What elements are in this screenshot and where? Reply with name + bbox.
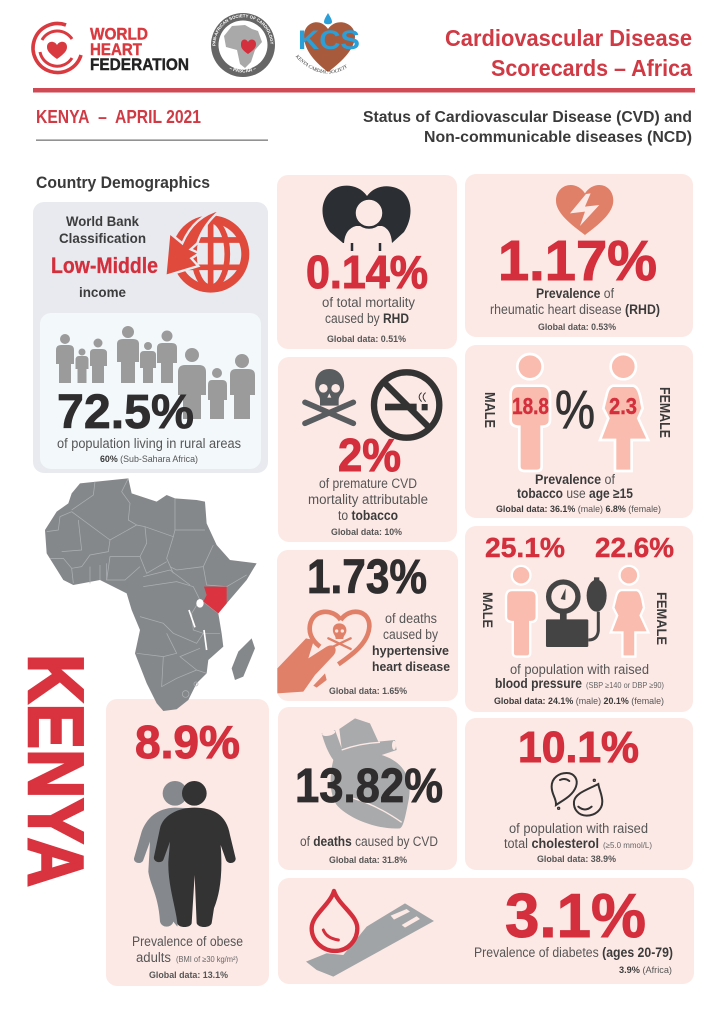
text: RHD mortality caption: of total mortality — [322, 295, 415, 310]
panel: diabetes — [278, 878, 694, 984]
text: RHD prevalence global data: Global data: 0.53% — [538, 322, 616, 333]
panel: RHD prevalence — [465, 174, 693, 337]
logo: World Heart Federation — [33, 23, 189, 74]
header rule — [33, 88, 695, 92]
map: Africa with Kenya highlighted — [45, 478, 257, 711]
text: CVD deaths caption: of deaths caused by CVD — [300, 834, 438, 849]
icon: cholesterol drops — [552, 773, 602, 816]
logo: World Heart Federation: WORLD — [90, 26, 148, 44]
inner panel: rural population — [40, 313, 261, 469]
text: RHD mortality caption: caused by RHD — [325, 311, 409, 326]
logo: Kenya Cardiac Society: KENYA CARDIAC SOCIETY — [296, 54, 347, 74]
text: diabetes comparison: 3.9% (Africa) — [619, 965, 672, 976]
text: hypertensive caption: caused by — [383, 627, 438, 642]
text: cholesterol caption: of population with raised — [509, 821, 648, 836]
stat: female tobacco: 2.3 — [609, 393, 637, 419]
icon: male figure — [506, 566, 537, 657]
text: tobacco mortality caption: of premature CVD — [319, 476, 417, 491]
text: tobacco mortality caption: to tobacco — [338, 508, 398, 523]
text: blood pressure global data: Global data: 24.1% (male) 20.1% (female) — [494, 696, 664, 707]
panel: blood pressure — [465, 526, 693, 712]
header logos — [31, 13, 360, 77]
text: hypertensive caption: of deaths — [385, 611, 437, 626]
text: hypertensive global data: Global data: 1.65% — [329, 686, 407, 697]
icon: group of people — [56, 326, 255, 419]
text: hypertensive caption: heart disease — [372, 659, 450, 674]
icon: dark heart with person — [322, 186, 411, 262]
icon: blood drop on test strip — [306, 891, 434, 977]
text: tobacco use global data: Global data: 36.1% (male) 6.8% (female) — [496, 504, 661, 515]
icon: anatomical heart — [322, 718, 410, 829]
subtitle: Status of Cardiovascular Disease (CVD) and — [363, 109, 692, 126]
panel: demographics — [33, 202, 268, 473]
text: diabetes caption: Prevalence of diabetes (ages 20-79) — [474, 945, 673, 960]
subtitle — [363, 109, 692, 146]
panel: RHD mortality — [277, 175, 457, 349]
text: hypertensive caption: hypertensive — [372, 643, 449, 658]
stat: CVD deaths: 13.82% — [295, 760, 443, 813]
text: income classification: Low-Middle — [51, 253, 158, 278]
text: blood pressure caption: (SBP ≥140 or DBP ≥90) — [586, 681, 664, 690]
panel: tobacco mortality — [278, 357, 457, 542]
stat: hypertensive heart disease: 1.73% — [307, 551, 427, 604]
label: male: MALE — [480, 592, 496, 628]
text: hypertensive caption — [372, 611, 450, 674]
text: income classification — [51, 213, 158, 300]
title — [445, 25, 692, 81]
text: income classification: Classification — [59, 230, 146, 246]
text: tobacco mortality caption: mortality attributable — [308, 492, 428, 507]
text: tobacco mortality caption — [308, 476, 428, 523]
text: RHD prevalence caption — [490, 286, 660, 317]
logo: PASCAR — [211, 13, 275, 77]
text: obesity caption: (BMI of ≥30 kg/m²) — [176, 955, 238, 964]
panel: hypertensive heart disease — [277, 550, 458, 701]
text: income classification: income — [79, 284, 126, 300]
panel: tobacco use — [465, 345, 693, 518]
panel: cholesterol — [465, 718, 693, 870]
text: blood pressure caption: of population with raised — [510, 662, 649, 677]
icon: no smoking — [374, 372, 439, 438]
text: obesity caption: adults — [136, 950, 171, 965]
text: rural comparison: 60% (Sub-Sahara Africa) — [100, 454, 198, 465]
logo: PASCAR: – PASCAR – — [230, 68, 256, 72]
text: tobacco use caption — [517, 472, 633, 501]
heading: country demographics: Country Demographics — [36, 173, 210, 192]
text: cholesterol caption — [504, 821, 652, 851]
text: RHD prevalence caption: rheumatic heart disease (RHD) — [490, 302, 660, 317]
text: RHD mortality caption — [322, 295, 415, 326]
panel: CVD deaths — [278, 707, 457, 870]
text: obesity caption: Prevalence of obese — [132, 934, 243, 949]
icon: male and female figures — [511, 354, 648, 471]
stat: percent sign: % — [555, 380, 595, 440]
text: income classification: World Bank — [66, 213, 139, 229]
icon: globe with down arrow — [165, 209, 249, 293]
stat: tobacco mortality: 2% — [338, 429, 401, 481]
text: tobacco use caption: Prevalence of — [535, 472, 615, 487]
stat: male blood pressure: 25.1% — [485, 532, 565, 563]
title: Scorecards – Africa — [491, 55, 692, 81]
logo: Kenya Cardiac Society: KCS — [298, 25, 360, 55]
icon: skull and crossbones — [305, 369, 353, 423]
icon: female figure — [611, 566, 648, 657]
stat: diabetes: 3.1% — [505, 882, 646, 951]
icon: hand holding heart with skull — [277, 612, 369, 693]
title: Cardiovascular Disease — [445, 25, 692, 51]
logo: PASCAR: PAN-AFRICAN SOCIETY OF CARDIOLOGY — [212, 14, 274, 46]
text: cholesterol global data: Global data: 38.9% — [537, 854, 617, 865]
text: rural caption: of population living in rural areas — [57, 436, 241, 451]
logo: World Heart Federation: HEART — [90, 41, 142, 59]
stat: female blood pressure: 22.6% — [595, 532, 674, 563]
text: RHD prevalence caption: Prevalence of — [536, 286, 614, 301]
label: male: MALE — [481, 392, 498, 428]
text: CVD deaths global data: Global data: 31.8% — [329, 855, 407, 866]
logo: World Heart Federation: FEDERATION — [90, 56, 189, 74]
logo: Kenya Cardiac Society — [296, 13, 360, 74]
stat: rural percentage: 72.5% — [57, 386, 194, 439]
text: obesity caption — [132, 934, 243, 965]
panel: obesity — [106, 699, 269, 986]
stat: cholesterol: 10.1% — [518, 723, 639, 772]
country and date: KENYA – APRIL 2021 — [36, 107, 201, 127]
text: cholesterol caption: (≥5.0 mmol/L) — [603, 841, 652, 850]
icon: obese people — [134, 781, 236, 927]
stat: RHD mortality: 0.14% — [306, 246, 428, 298]
text: RHD mortality global data: Global data: 0.51% — [327, 334, 407, 345]
text: obesity global data: Global data: 13.1% — [149, 970, 229, 981]
text: blood pressure caption: blood pressure — [495, 676, 582, 691]
text: blood pressure caption — [495, 662, 664, 691]
text: cholesterol caption: total cholesterol — [504, 836, 599, 851]
icon: blood pressure monitor — [546, 577, 607, 647]
text: tobacco mortality global data: Global data: 10% — [331, 527, 402, 538]
text: tobacco use caption: tobacco use age ≥15 — [517, 486, 633, 501]
label: female: FEMALE — [654, 592, 670, 645]
stat: RHD prevalence: 1.17% — [498, 229, 657, 293]
label: female: FEMALE — [656, 387, 673, 438]
icon: broken heart — [556, 185, 613, 235]
stat: male tobacco: 18.8 — [512, 393, 549, 419]
stat: obesity: 8.9% — [135, 716, 240, 768]
big label: KENYA: KENYA — [12, 654, 100, 887]
subtitle: Non-communicable diseases (NCD) — [424, 129, 692, 146]
